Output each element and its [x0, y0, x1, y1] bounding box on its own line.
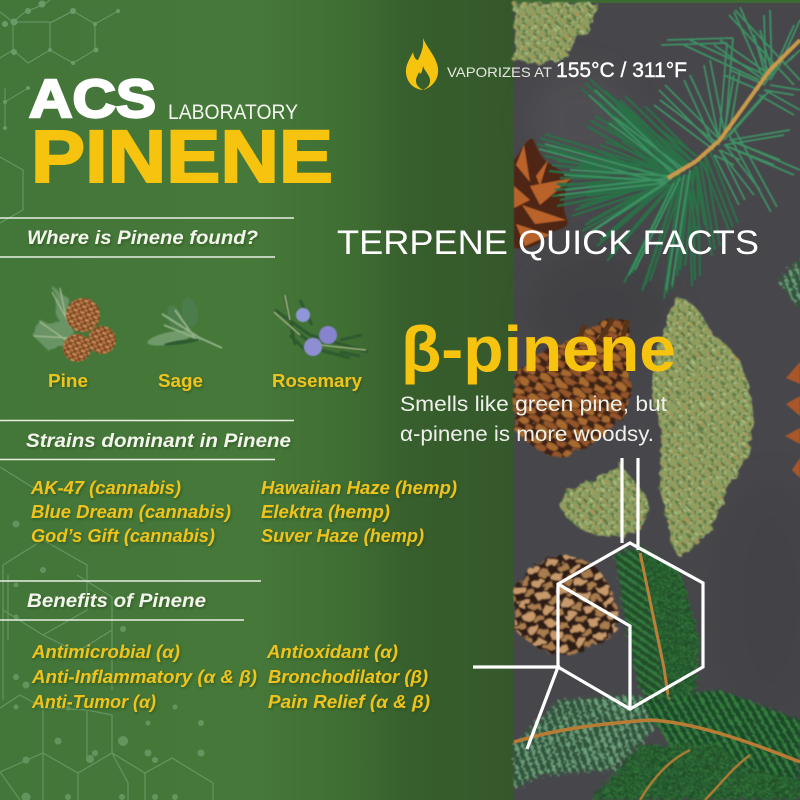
small cannabis bud [560, 462, 650, 537]
benefits list: column one: Anti-Inflammatory (α & β) [31, 667, 257, 687]
description text: Smells like green pine, but [400, 393, 667, 416]
small sprig at right [778, 258, 800, 310]
benefits list: column one: Anti-Tumor (α) [31, 692, 156, 712]
strain list: hemp: Hawaiian Haze (hemp) [261, 478, 457, 498]
title: ACS Laboratory Pinene [29, 69, 333, 198]
slate background [514, 3, 800, 800]
photo: pine, cannabis buds and cones on slate [514, 0, 800, 800]
section: where is Pinene found: Where is Pinene found? [27, 227, 258, 249]
benefits list: column two: Pain Relief (α & β) [268, 692, 430, 712]
top cannabis bud [514, 3, 597, 63]
large cannabis bud [652, 296, 753, 556]
strain list: hemp [261, 478, 457, 546]
red cone at right edge [785, 362, 800, 478]
top strip [514, 0, 800, 3]
LABORATORY label: LABORATORY [168, 101, 298, 124]
hexagon pattern: top left [0, 0, 120, 223]
middle pine cone [514, 318, 632, 458]
heading: beta-pinene: β-pinene [401, 313, 676, 385]
icon: pine sprig with cones [31, 286, 116, 362]
lower pine cone [514, 556, 619, 655]
icon: rosemary [274, 295, 368, 358]
strain list: cannabis: God’s Gift (cannabis) [31, 526, 215, 546]
benefits list: column two [266, 642, 430, 712]
benefits list: column two: Bronchodilator (β) [268, 667, 428, 687]
description text: α-pinene is more woodsy. [400, 423, 654, 446]
strain list: cannabis: Blue Dream (cannabis) [31, 502, 231, 522]
label: Rosemary: Rosemary [272, 370, 363, 391]
strain list: hemp: Elektra (hemp) [261, 502, 390, 522]
benefits list: column one: Antimicrobial (α) [31, 642, 180, 662]
benefits list: column two: Antioxidant (α) [266, 642, 398, 662]
strain list: cannabis: AK-47 (cannabis) [30, 478, 181, 498]
label: Sage: Sage [158, 370, 203, 391]
section: strains dominant in Pinene: Strains dominant in Pinene [26, 430, 291, 452]
benefits list: column one [31, 642, 257, 712]
label: Pine: Pine [48, 370, 88, 391]
icon: flame [406, 38, 438, 90]
ACS wordmark: ACS [29, 69, 156, 129]
description text [400, 393, 667, 446]
PINENE heading: PINENE [31, 115, 333, 198]
pine branch [537, 7, 800, 299]
icon: sage [146, 296, 222, 349]
orange pine cone [514, 139, 572, 248]
strain list: hemp: Suver Haze (hemp) [261, 526, 424, 546]
vaporization temperature: VAPORIZES AT [447, 64, 552, 80]
strain list: cannabis [30, 478, 231, 546]
molecule diagram [473, 458, 703, 749]
section: benefits of Pinene: Benefits of Pinene [27, 590, 206, 612]
vaporization temperature [447, 59, 687, 82]
vaporization temperature: 155°C / 311°F [556, 59, 687, 82]
bottom fir branch [514, 690, 800, 800]
panel: green background [0, 0, 514, 800]
vertical fir branch [615, 545, 700, 722]
hexagon pattern: bottom left [0, 467, 213, 800]
heading: terpene quick facts: TERPENE QUICK FACTS [337, 224, 759, 262]
